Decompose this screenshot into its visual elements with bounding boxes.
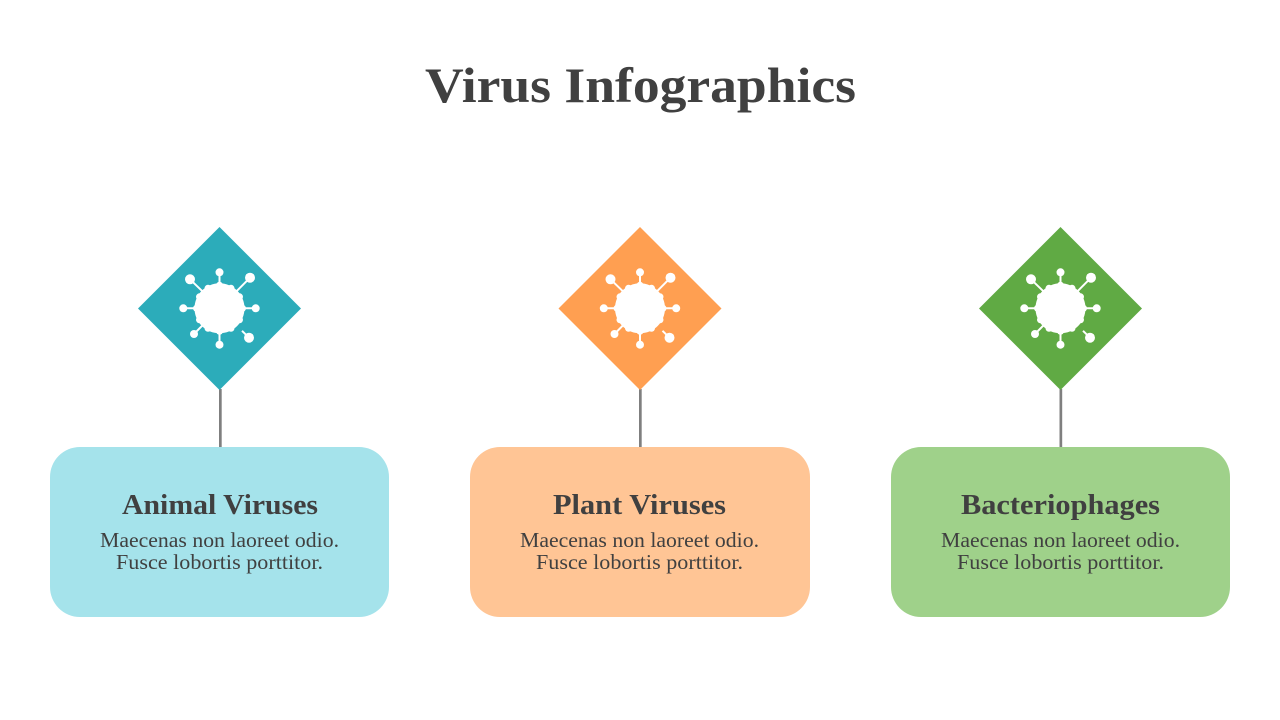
card body text: Fusce lobortis porttitor. (536, 550, 743, 574)
icon diamond (138, 227, 301, 390)
icon diamond (558, 227, 722, 390)
panel: bacteriophages (891, 227, 1230, 617)
card body text (100, 528, 339, 574)
card heading: Plant Viruses (553, 489, 726, 521)
card heading: Animal Viruses (122, 489, 318, 521)
icon diamond (979, 227, 1142, 390)
connector line (219, 389, 222, 448)
icon: virus (600, 268, 680, 349)
text card (50, 447, 389, 617)
card body text: Maecenas non laoreet odio. (941, 528, 1180, 552)
card body text (941, 528, 1180, 574)
text card (891, 447, 1230, 617)
panel: animal viruses (50, 227, 389, 617)
icon: virus (1020, 268, 1101, 349)
card heading: Bacteriophages (961, 489, 1160, 521)
connector line (1060, 389, 1062, 448)
card body text: Maecenas non laoreet odio. (100, 528, 339, 552)
panel: plant viruses (470, 227, 810, 617)
title: Virus Infographics (425, 57, 856, 113)
text card (470, 447, 810, 617)
card body text: Fusce lobortis porttitor. (116, 550, 323, 574)
connector line (639, 389, 642, 448)
card body text: Maecenas non laoreet odio. (520, 528, 759, 552)
card body text: Fusce lobortis porttitor. (957, 550, 1164, 574)
card body text (520, 528, 759, 574)
icon: virus (179, 268, 260, 349)
